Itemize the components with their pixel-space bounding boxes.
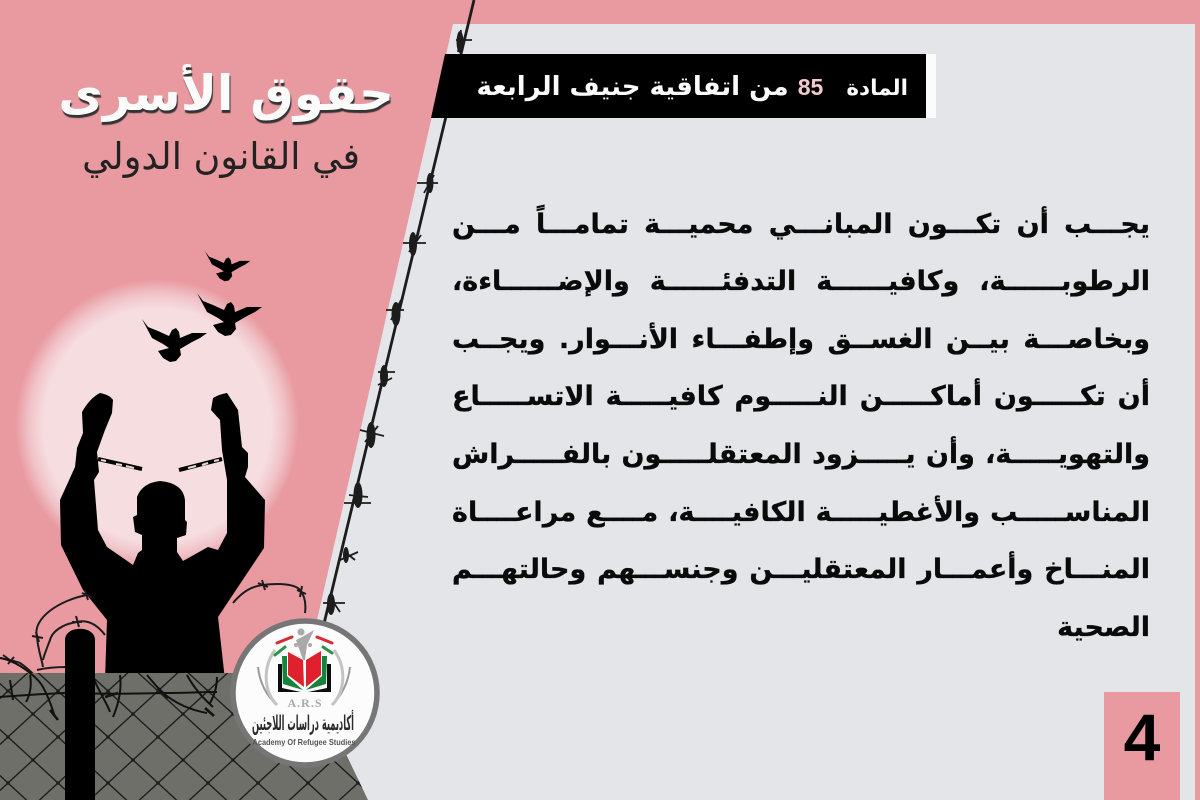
header bar shape	[431, 54, 936, 118]
text block: article body: والتهويـــــة، وأن يـــــزود المعتقلـــــون بالفـــــراش	[452, 439, 1150, 470]
broken chain: left	[98, 459, 142, 469]
panel: grey content sheet	[276, 24, 1195, 800]
bird: top	[205, 251, 250, 281]
text block: article body: المنـــاخ وأعمـــار المعتقليـــن وجنســـهم وحالتهـــم	[452, 554, 1150, 585]
logo emblem: figures	[294, 628, 314, 660]
sun glow behind the prisoner	[15, 279, 299, 571]
text block: article body: يجـــب أن تكـــون المبانـــي محميـــة تمامـــاً مـــن	[452, 209, 1150, 240]
heading: main title: حقوق الأسرى	[58, 66, 394, 122]
broken chain: right	[179, 459, 222, 470]
logo text: ARS: A.R.S	[287, 696, 323, 710]
bird: lower	[142, 319, 207, 362]
logo emblem: red and green accents	[275, 637, 332, 655]
logo emblem: open book	[278, 651, 331, 692]
page number: 4	[1124, 700, 1160, 774]
text block: article body: الصحية	[1057, 612, 1150, 643]
text block: article body: الرطوبــــــة، وكافيــــــة التدفئــــــة والإضــــــاءة،	[452, 266, 1150, 297]
bird: middle	[197, 293, 262, 336]
text block: article body: وبخاصـــة بيــن الغســق وإطفـــاء الأنـــوار. ويجــب	[452, 324, 1150, 355]
logo circle	[233, 621, 377, 765]
panel: number box background	[1104, 692, 1180, 800]
text block: article body: أن تكـــــون أماكـــــن النـــــوم كافيـــــة الاتســـــاع	[452, 381, 1150, 412]
fence post	[65, 629, 95, 800]
text block: article body: المناســـــب والأغطيـــــة الكافيــــة، مــــع مراعــــاة	[452, 497, 1150, 528]
logo text: Arabic calligraphy: أكاديمية دراسات اللاجئين	[252, 709, 354, 736]
prisoner silhouette with raised fists	[60, 393, 265, 680]
chain-link fence	[0, 673, 368, 800]
text block: article body	[452, 204, 1150, 643]
barbed wire coils behind the fence	[0, 580, 306, 717]
header bar	[431, 54, 936, 118]
header text: article 85: المادة 85 من اتفاقية جنيف الرابعة	[477, 72, 908, 102]
barbed wire divider	[322, 0, 474, 632]
logo text: English name: Academy Of Refugee Studies	[252, 737, 356, 747]
logo emblem: laurel arcs	[258, 650, 350, 705]
heading: subtitle: في القانون الدولي	[82, 135, 360, 178]
fence top barbed wire	[0, 658, 217, 720]
